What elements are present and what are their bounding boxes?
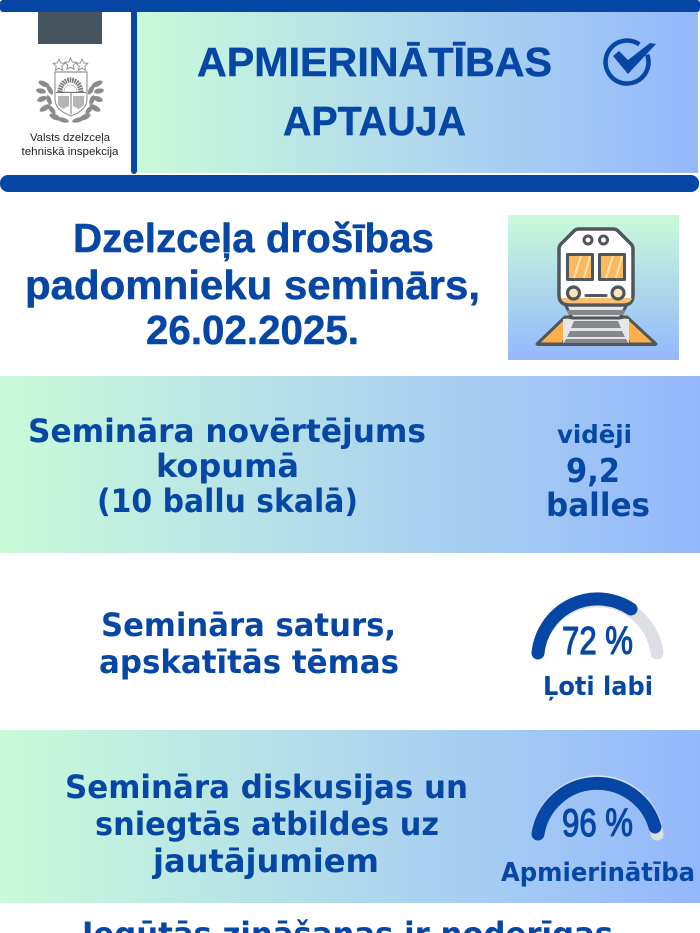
- heading: overall rating: Semināra novērtējums: [28, 412, 426, 450]
- heading: content: Semināra saturs,: [101, 606, 396, 644]
- score value: 9,2: [566, 451, 620, 490]
- heading: discussions: Semināra diskusijas un: [65, 768, 468, 806]
- seminar title: [25, 215, 480, 353]
- gauge: 96 percent: 96 %: [562, 802, 633, 845]
- icon: train: [537, 229, 656, 344]
- icon: check mark: [606, 41, 656, 84]
- score value: [546, 420, 650, 524]
- heading: overall rating: (10 ballu skalā): [97, 482, 358, 520]
- seminar title: Dzelzceļa drošības: [73, 215, 434, 261]
- gauge: 72 percent: [538, 599, 657, 663]
- heading: overall rating: kopumā: [156, 447, 299, 485]
- title: APMIERINĀTĪBAS: [197, 39, 552, 85]
- seminar title: padomnieku seminārs,: [25, 262, 480, 308]
- score value: balles: [546, 486, 650, 524]
- panel: discussions: [0, 730, 700, 903]
- panel: content rating: [99, 599, 657, 702]
- panel: train image: [508, 215, 679, 360]
- logo caption: tehniskā inspekcija: [22, 146, 119, 158]
- heading: discussions: jautājumiem: [151, 842, 379, 880]
- header banner: [0, 0, 700, 192]
- title: [197, 39, 552, 144]
- title: APTAUJA: [283, 98, 466, 144]
- panel: overall score: [0, 376, 700, 553]
- heading: content: [99, 606, 399, 681]
- heading: overall rating: [28, 412, 426, 520]
- seminar title: 26.02.2025.: [146, 307, 359, 353]
- heading: discussions: sniegtās atbildes uz: [95, 805, 439, 843]
- logo caption: [22, 132, 119, 158]
- logo: coat of arms: [36, 58, 104, 124]
- grey tab: [38, 12, 102, 44]
- logo caption: Valsts dzelzceļa: [30, 132, 111, 144]
- heading: content: apskatītās tēmas: [99, 643, 399, 681]
- gauge: 96 percent: [538, 782, 657, 845]
- score value: vidēji: [557, 420, 632, 449]
- heading: discussions: [65, 768, 468, 880]
- gauge: 72 percent: 72 %: [562, 620, 633, 663]
- label: very good: Ļoti labi: [543, 672, 653, 702]
